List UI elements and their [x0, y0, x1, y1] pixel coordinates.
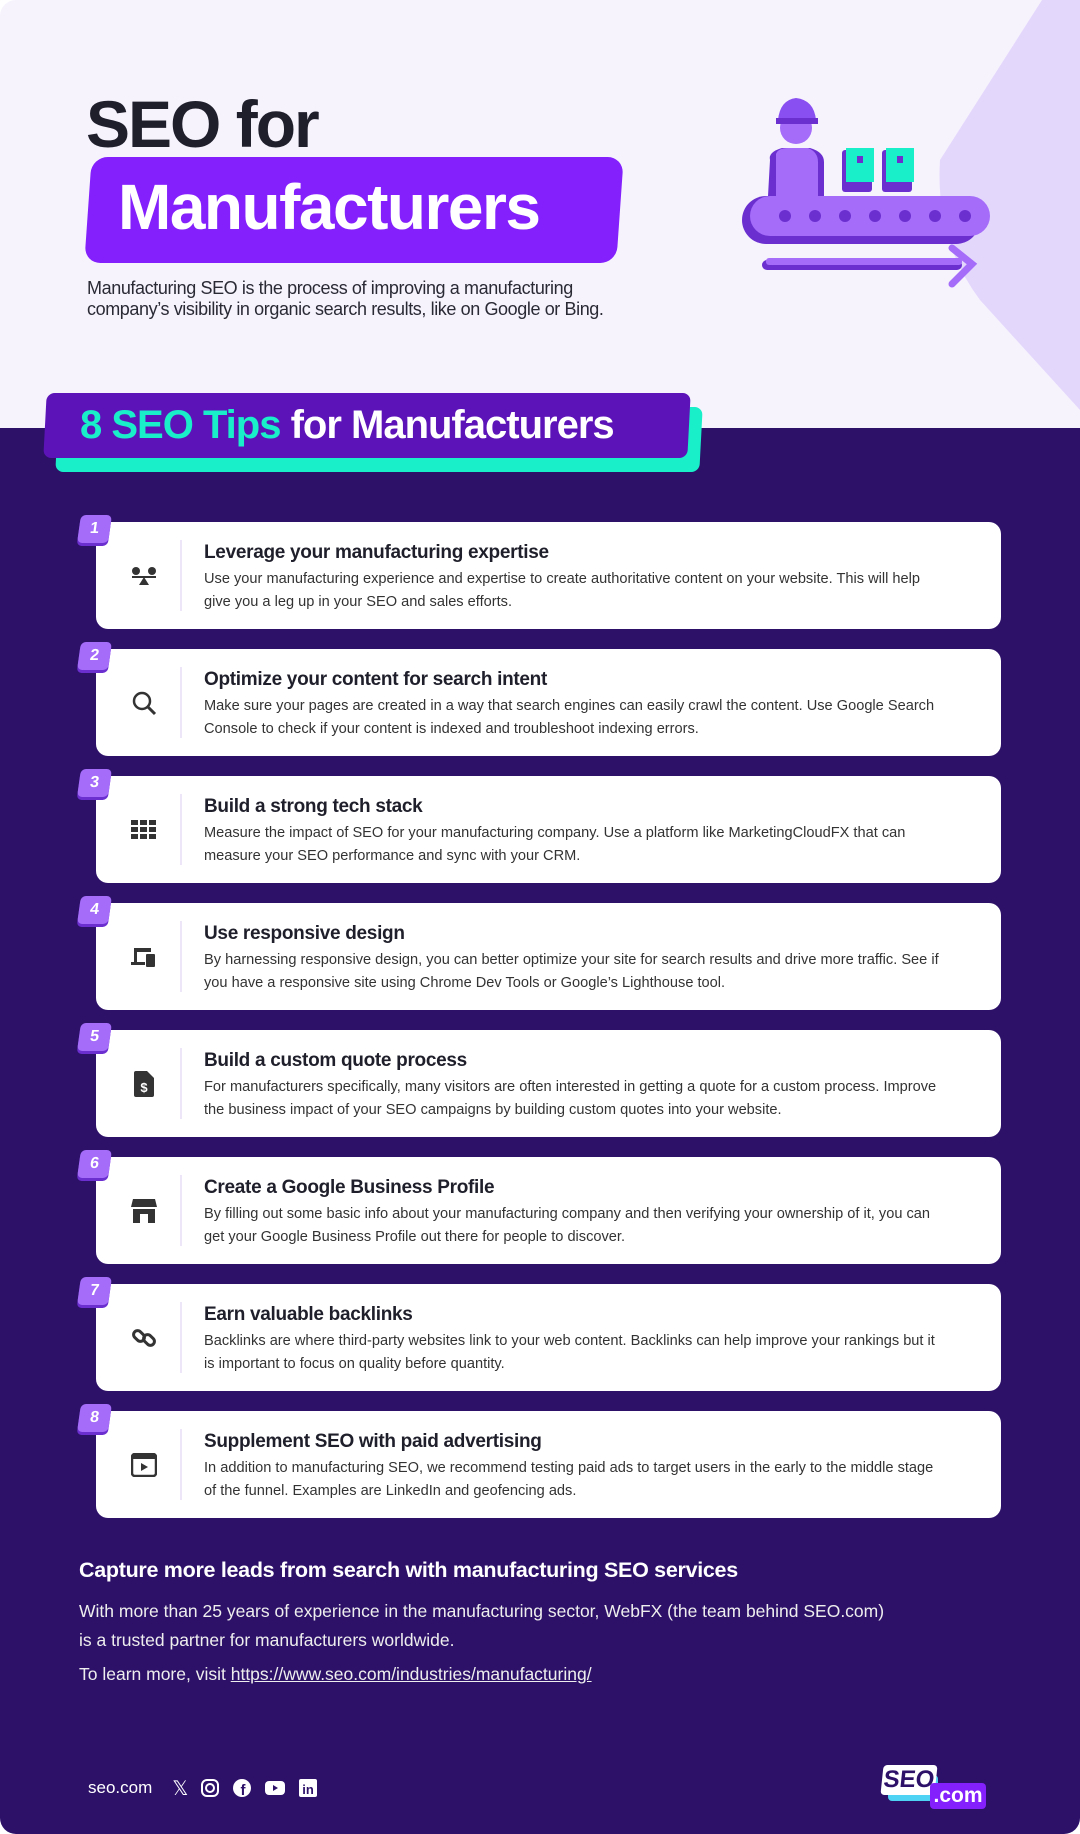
logo: SEO.com: .com [933, 1784, 982, 1807]
text: 6 [89, 1155, 100, 1172]
text: 5 [89, 1028, 100, 1045]
text: 2 [89, 647, 100, 664]
card 5: $ [140, 1080, 148, 1095]
card 7: Earn valuable backlinks [204, 1304, 413, 1325]
card 1: Use your manufacturing experience and expertise to create authoritative content on your website. This will help give you a leg up in your SEO and sales efforts. [204, 571, 920, 610]
text: 7 [89, 1282, 100, 1299]
tips banner [44, 393, 702, 472]
card 4: By harnessing responsive design, you can better optimize your site for search results and drive more traffic. See if you have a responsive site using Chrome Dev Tools or Google’s Lighthouse tool. [204, 952, 939, 990]
footer text [79, 1601, 884, 1650]
header background [0, 0, 1080, 430]
footer social row [88, 1778, 317, 1800]
text: 3 [89, 774, 100, 791]
title: SEO for: SEO for [86, 87, 318, 161]
footer social row: 𝕏 [172, 1778, 188, 1800]
footer text: is a trusted partner for manufacturers worldwide. [79, 1630, 454, 1650]
decorative shape [940, 0, 1080, 410]
text: 8 [89, 1409, 100, 1426]
card 5 [96, 1030, 1001, 1137]
footer social row: in [303, 1782, 314, 1797]
card 8: In addition to manufacturing SEO, we recommend testing paid ads to target users in the early to the middle stage of the funnel. Examples are LinkedIn and geofencing ads. [204, 1460, 933, 1498]
text: 4 [89, 901, 100, 918]
footer heading: Capture more leads from search with manufacturing SEO services [79, 1558, 738, 1582]
card 5: For manufacturers specifically, many visitors are often interested in getting a quote for a custom process. Improve the business impact of your SEO campaigns by building custom quotes into your website. [204, 1079, 936, 1118]
card 4 [96, 903, 1001, 1010]
dark lower background [0, 428, 1080, 1834]
card 3 [96, 776, 1001, 883]
card 6: Create a Google Business Profile [204, 1177, 494, 1198]
learn more link: To learn more, visit https://www.seo.com/industries/manufacturing/ [79, 1664, 592, 1684]
footer text: With more than 25 years of experience in the manufacturing sector, WebFX (the team behind SEO.com) [79, 1601, 884, 1621]
card 6: By filling out some basic info about your manufacturing company and then verifying your ownership of it, you can get your Google Business Profile out there for people to discover. [204, 1206, 930, 1244]
card 3: Measure the impact of SEO for your manufacturing company. Use a platform like MarketingCloudFX that can measure your SEO performance and sync with your CRM. [204, 825, 905, 864]
logo: SEO.com: SEO [882, 1766, 936, 1793]
card 1: Leverage your manufacturing expertise [204, 542, 549, 563]
card 1 [96, 522, 1001, 629]
description: company’s visibility in organic search results, like on Google or Bing. [87, 299, 604, 319]
illustration: worker on conveyor [742, 98, 990, 288]
card 6 [96, 1157, 1001, 1264]
card 7: Backlinks are where third-party websites link to your web content. Backlinks can help improve your rankings but it is important to focus on quality before quantity. [204, 1333, 935, 1372]
card 4: Use responsive design [204, 923, 405, 944]
tips banner: 8 SEO Tips for Manufacturers [80, 403, 614, 447]
logo: SEO.com [880, 1765, 986, 1809]
card 2 [96, 649, 1001, 756]
card 5: Build a custom quote process [204, 1050, 467, 1071]
description: Manufacturing SEO is the process of improving a manufacturing [87, 278, 573, 298]
card 2: Make sure your pages are created in a way that search engines can easily crawl the content. Use Google Search Console to check if your content is indexed and troubleshoot indexing errors. [204, 698, 934, 736]
title banner: Manufacturers [84, 157, 624, 263]
footer social row: seo.com [88, 1778, 152, 1797]
card 2: Optimize your content for search intent [204, 669, 547, 690]
card 7 [96, 1284, 1001, 1391]
description [87, 278, 604, 319]
card 8: Supplement SEO with paid advertising [204, 1431, 542, 1452]
card 3: Build a strong tech stack [204, 796, 422, 817]
card 8 [96, 1411, 1001, 1518]
text: Manufacturers [118, 171, 540, 243]
text: 1 [89, 520, 100, 537]
